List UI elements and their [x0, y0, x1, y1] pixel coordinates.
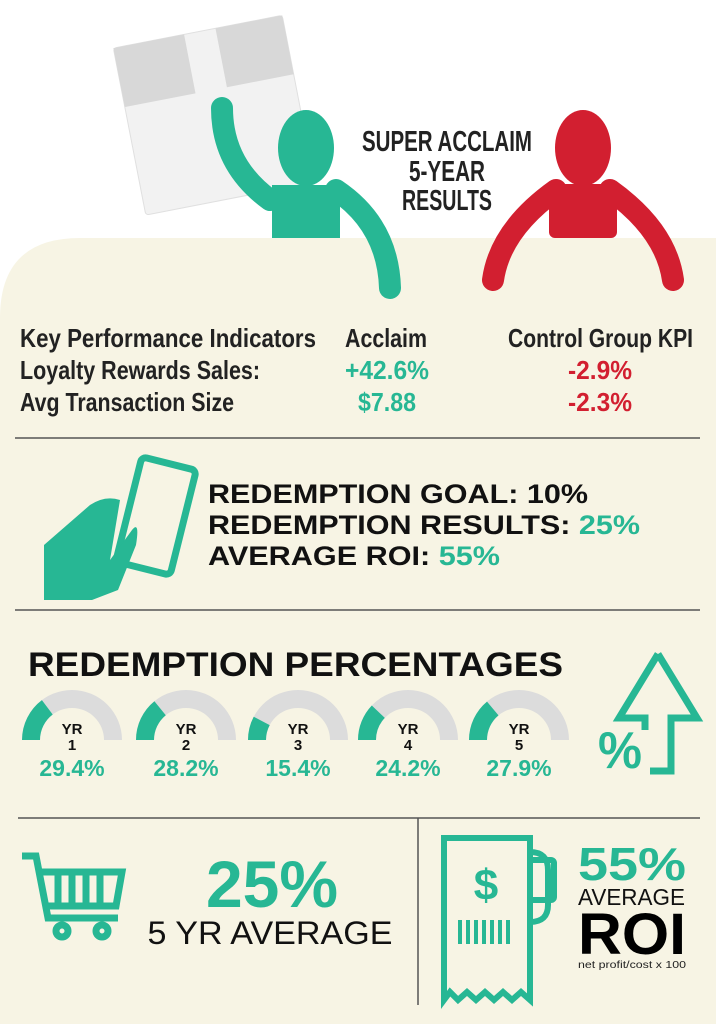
KPI table: $7.88: [358, 387, 416, 417]
KPI table: Acclaim: [345, 323, 427, 353]
icon: percent up arrow: %: [598, 722, 642, 780]
stat: 55% average ROI: 55%: [578, 838, 686, 890]
icon: receipt with dollar: $: [474, 861, 498, 910]
gauge: year 5: 5: [515, 737, 523, 754]
title: [362, 126, 532, 217]
gauge: year 4: [358, 690, 458, 781]
gauge: year 3: YR: [288, 721, 309, 738]
gauge: year 4: YR: [398, 721, 419, 738]
gauge: year 3: 3: [294, 737, 302, 754]
gauge: year 2: 2: [182, 737, 190, 754]
stat: 55% average ROI: [578, 838, 687, 971]
redemption summary text: [208, 479, 640, 571]
gauge: year 3: 15.4%: [265, 755, 331, 781]
gauge: year 1: YR: [62, 721, 83, 738]
heading: redemption percentages: REDEMPTION PERCENTAGES: [28, 646, 563, 684]
KPI table: Key Performance Indicators: [20, 323, 316, 353]
icon: receipt with dollar: [444, 838, 554, 1000]
stat: 55% average ROI: ROI: [578, 902, 686, 967]
gauge: year 4: 24.2%: [375, 755, 441, 781]
title: RESULTS: [402, 185, 492, 217]
gauge: year 5: YR: [509, 721, 530, 738]
gauge: year 1: [22, 690, 122, 781]
title: SUPER ACCLAIM: [362, 126, 532, 158]
gauge: year 1: 29.4%: [39, 755, 105, 781]
icon: shopping cart: [22, 856, 122, 937]
redemption summary text: REDEMPTION RESULTS: 25%: [208, 510, 640, 540]
stat: 25% five year average: [148, 847, 392, 951]
redemption summary text: REDEMPTION GOAL: 10%: [208, 479, 588, 509]
stat: 55% average ROI: AVERAGE: [578, 884, 685, 910]
gauge: year 2: 28.2%: [153, 755, 219, 781]
icon: red person: [493, 110, 673, 280]
gauge: year 1: 1: [68, 737, 76, 754]
KPI table: [20, 323, 693, 417]
gauge: year 5: 27.9%: [486, 755, 552, 781]
KPI table: +42.6%: [345, 355, 429, 385]
cream panel background: [0, 238, 716, 1024]
redemption summary text: AVERAGE ROI: 55%: [208, 541, 500, 571]
title: 5-YEAR: [409, 156, 485, 188]
KPI table: -2.9%: [568, 355, 632, 385]
KPI table: -2.3%: [568, 387, 632, 417]
icon: percent up arrow: [598, 654, 697, 780]
icon: teal person: [222, 108, 390, 288]
icon: paper held up: [113, 15, 315, 215]
KPI table: Loyalty Rewards Sales:: [20, 355, 260, 385]
KPI table: Avg Transaction Size: [20, 387, 234, 417]
gauge: year 2: YR: [176, 721, 197, 738]
gauges: [22, 690, 569, 781]
icon: hand holding card: [44, 457, 196, 600]
gauge: year 3: [248, 690, 348, 781]
stat: 55% average ROI: net profit/cost x 100: [578, 960, 687, 971]
stat: 25% five year average: 5 YR AVERAGE: [148, 915, 392, 951]
stat: 25% five year average: 25%: [206, 847, 338, 921]
gauge: year 2: [136, 690, 236, 781]
gauge: year 5: [469, 690, 569, 781]
gauge: year 4: 4: [404, 737, 413, 754]
